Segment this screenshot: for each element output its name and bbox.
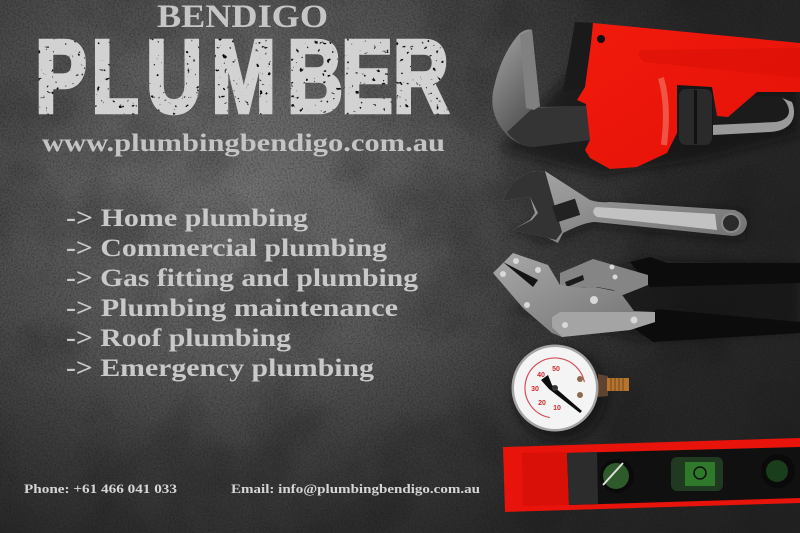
website url: www.plumbingbendigo.com.au: [42, 130, 445, 157]
icon: pressure gauge: 50: [552, 366, 560, 373]
icon: red spirit level: [503, 438, 800, 512]
icon: adjustable wrench: [503, 171, 747, 243]
icon: pressure gauge: [512, 344, 629, 441]
heading: Plumber: PLUMBER: [35, 20, 449, 135]
services list: -> Roof plumbing: [66, 325, 292, 352]
services list: -> Home plumbing: [66, 205, 309, 232]
icon: pressure gauge: 40: [537, 372, 545, 379]
icon: pressure gauge: 10: [553, 405, 561, 412]
contact: phone: Phone: +61 466 041 033: [24, 481, 178, 496]
services list: [66, 205, 419, 382]
services list: -> Plumbing maintenance: [66, 295, 398, 322]
icon: locking pliers: [493, 253, 800, 342]
icon: red pipe wrench: [492, 22, 800, 175]
icon: pressure gauge: 20: [538, 400, 546, 407]
icon: pressure gauge: 30: [531, 386, 539, 393]
contact: email: Email: info@plumbingbendigo.com.au: [231, 481, 480, 496]
heading: Bendigo: BENDIGO: [157, 0, 328, 35]
services list: -> Gas fitting and plumbing: [66, 265, 419, 292]
services list: -> Commercial plumbing: [66, 235, 388, 262]
services list: -> Emergency plumbing: [66, 355, 375, 382]
